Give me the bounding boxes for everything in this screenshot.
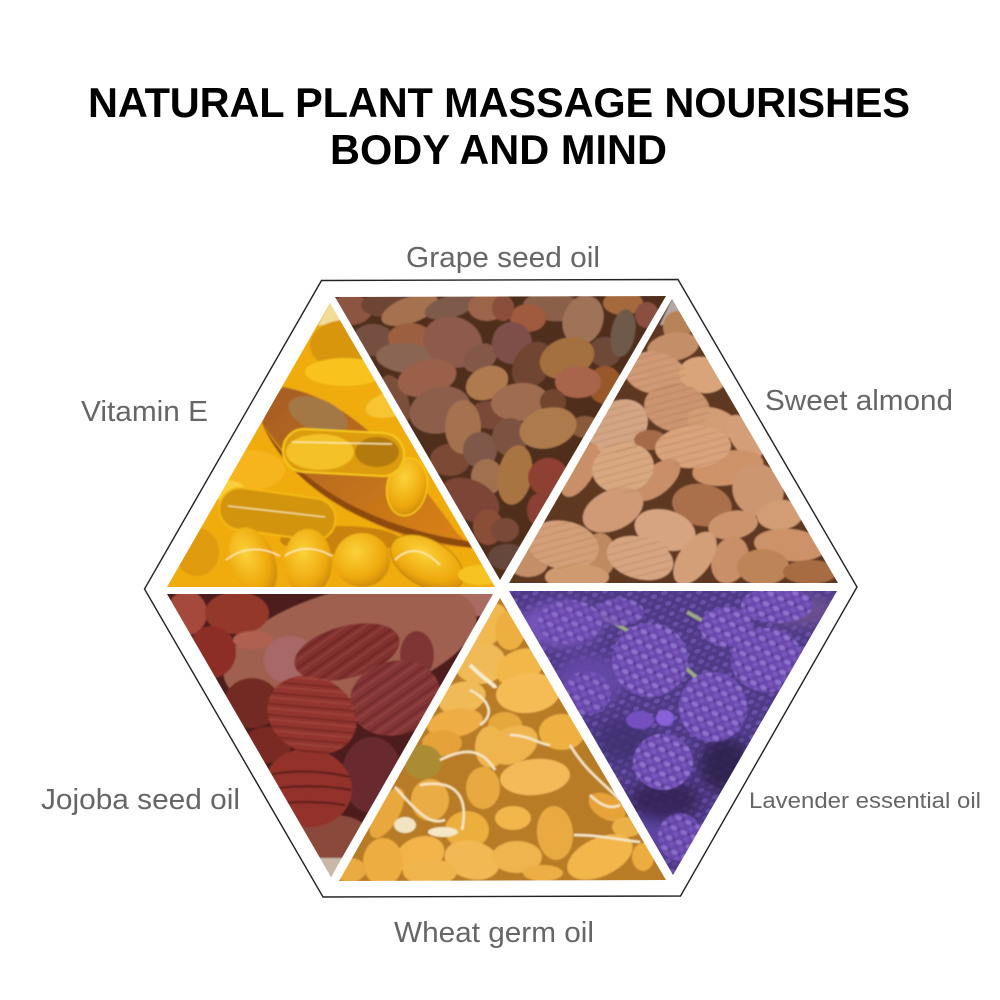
panel: jojoba seed [167,594,493,877]
label: wheat germ oil: Wheat germ oil [394,917,594,949]
hexagon outline [144,280,857,897]
label: vitamin E: Vitamin E [81,396,208,428]
panel: grape seed [328,288,670,585]
label: lavender essential oil: Lavender essential oil [749,788,981,813]
panel: sweet almond [505,295,845,592]
panel: lavender [505,587,845,878]
title: NATURAL PLANT MASSAGE NOURISHES [88,79,910,126]
label: grape seed oil: Grape seed oil [406,242,600,274]
panel: wheat germ [334,595,670,889]
panel: vitamin E capsules [167,303,495,587]
title [88,79,910,173]
title: BODY AND MIND [330,126,667,173]
label: jojoba seed oil: Jojoba seed oil [41,784,240,816]
label: sweet almond: Sweet almond [765,385,953,417]
